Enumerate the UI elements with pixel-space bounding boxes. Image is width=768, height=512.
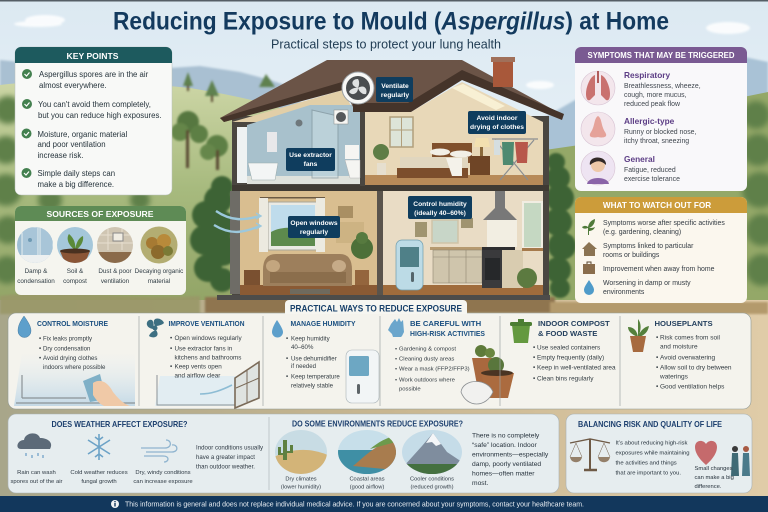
icon: house <box>582 242 597 256</box>
column: control moisture: Avoid drying clothes <box>43 355 97 362</box>
sources header: SOURCES OF EXPOSURE <box>47 209 154 219</box>
balancing text <box>616 440 690 476</box>
icon: soil and compost <box>57 227 93 263</box>
sources header <box>15 206 186 221</box>
icon: decaying organic material <box>140 226 178 264</box>
watch text: Symptoms worse after specific activities <box>603 220 725 227</box>
sources labels: Damp & <box>25 268 48 275</box>
column: houseplants: and moisture <box>660 344 698 350</box>
icon: drop <box>18 316 31 338</box>
panel: practical ways to reduce exposure <box>8 300 751 409</box>
environment note: There is no completely <box>472 432 540 440</box>
small changes text: Small changes <box>694 466 733 472</box>
column: be careful: • <box>395 366 397 372</box>
icon: lungs <box>581 71 615 105</box>
icon: dust and poor ventilation <box>97 227 133 263</box>
label: open windows regularly: Open windows <box>290 220 338 227</box>
environment labels: (lower humidity) <box>281 484 321 490</box>
icon: heart <box>695 441 717 465</box>
key points text: make a big difference. <box>38 180 114 189</box>
column: houseplants: • <box>656 364 659 372</box>
weather labels: fungal growth <box>81 479 117 485</box>
label: open windows regularly <box>288 216 340 238</box>
practical heading tab <box>285 300 467 314</box>
panel: balancing risk and quality of life <box>566 414 752 493</box>
sources labels: compost <box>63 278 87 285</box>
column: compost: • <box>533 376 535 382</box>
column: houseplants: Good ventilation helps <box>660 384 725 390</box>
column: houseplants: • <box>656 384 659 390</box>
label: open windows regularly: regularly <box>300 229 328 236</box>
key points text: increase risk. <box>38 151 83 160</box>
column: be careful: • <box>395 346 397 352</box>
column: compost: Empty frequently (daily) <box>537 354 604 362</box>
weather labels: Cold weather reduces <box>70 470 128 476</box>
symptoms text: exercise tolerance <box>624 176 680 183</box>
icon: compost bin <box>510 319 532 343</box>
symptoms text <box>624 70 701 183</box>
environment labels: (reduced growth) <box>410 484 454 490</box>
icon: drop <box>272 320 283 338</box>
label: ventilate regularly: regularly <box>381 92 409 99</box>
sources labels: ventilation <box>101 278 130 285</box>
footer bar: This information is general and does not replace individual medical advice. If you are concerned about your symptoms, contact your healthcare team. <box>125 500 584 508</box>
watch header <box>575 197 747 213</box>
house illustration <box>214 57 564 300</box>
bathroom furnishings <box>248 110 360 180</box>
column: compost <box>510 319 616 382</box>
environment note: homes—often matter <box>472 470 535 478</box>
column: houseplants: • <box>656 334 659 342</box>
key points text: almost everywhere. <box>39 81 107 90</box>
clothes rack <box>492 139 538 180</box>
icon: damp window <box>17 227 53 263</box>
weather note: have a greater impact <box>196 454 255 461</box>
icon: nose <box>581 112 615 146</box>
symptoms text: General <box>624 154 655 164</box>
icon: gloves <box>388 318 404 337</box>
watch text: Worsening in damp or musty <box>603 280 691 287</box>
weather labels <box>10 470 193 485</box>
image: mountain <box>402 430 462 474</box>
column: manage humidity: • <box>286 374 288 380</box>
column: compost: Use sealed containers <box>537 344 600 352</box>
column: improve ventilation: • <box>170 335 172 342</box>
column: control moisture: • <box>39 355 41 362</box>
check icons <box>22 69 32 178</box>
label: ventilate regularly <box>376 77 413 102</box>
label: control humidity <box>408 196 472 219</box>
watch text: Improvement when away from home <box>603 266 715 273</box>
column: be careful <box>388 318 514 404</box>
symptoms text: reduced peak flow <box>624 101 680 108</box>
column: houseplants: Avoid overwatering <box>660 354 716 362</box>
environment labels: (good airflow) <box>350 484 384 490</box>
weather note: than outdoor weather. <box>196 464 255 470</box>
symptoms text: itchy throat, sneezing <box>624 138 689 145</box>
column: manage humidity: if needed <box>291 363 316 370</box>
symptoms header: SYMPTOMS THAT MAY BE TRIGGERED <box>588 51 735 60</box>
chimney <box>491 57 515 87</box>
weather note: Indoor conditions usually <box>196 444 264 452</box>
key points text <box>38 70 162 189</box>
column: be careful: BE CAREFUL WITH <box>410 319 482 328</box>
column: be careful: Wear a mask (FFP2/FFP3) <box>399 366 470 372</box>
icon: hand wiping <box>83 374 130 406</box>
column: be careful: Gardening & compost <box>399 346 456 352</box>
column: manage humidity: • <box>286 356 288 362</box>
symptoms text: Respiratory <box>624 70 670 80</box>
environments heading: DO SOME ENVIRONMENTS REDUCE EXPOSURE? <box>292 420 463 428</box>
column: be careful: Work outdoors where <box>399 378 456 384</box>
column: be careful: Cleaning dusty areas <box>399 356 454 362</box>
label: control humidity: Control humidity <box>413 201 467 208</box>
icon: info <box>111 500 119 508</box>
label: avoid indoor drying: drying of clothes <box>470 124 524 131</box>
watch text: environments <box>603 289 645 296</box>
weather labels: Rain can wash <box>17 470 56 476</box>
symptoms text: Runny or blocked nose, <box>624 129 696 136</box>
column: control moisture: Fix leaks promptly <box>43 336 93 342</box>
fan icon <box>342 72 374 104</box>
environment labels: Dry climates <box>285 476 317 482</box>
small changes text: difference. <box>694 484 722 490</box>
environment labels: Cooler conditions <box>410 476 454 482</box>
column: control moisture <box>14 316 135 406</box>
key points text: Moisture, organic material <box>38 130 127 139</box>
column: manage humidity: MANAGE HUMIDITY <box>290 319 356 328</box>
icon: wind <box>141 440 177 462</box>
icon: fatigued person <box>581 151 615 185</box>
key points text: Aspergillus spores are in the air <box>39 70 149 79</box>
key points text: You can't avoid them completely, <box>38 100 151 109</box>
key points text: Simple daily steps can <box>38 169 115 178</box>
environment labels <box>281 476 454 490</box>
sources labels: Decaying organic <box>135 268 183 275</box>
column: improve ventilation: kitchens and bathrooms <box>174 354 241 362</box>
house walls <box>217 82 550 300</box>
symptoms text: Breathlessness, wheeze, <box>624 83 701 90</box>
column: houseplants: Risk comes from soil <box>660 334 721 342</box>
panel: key points <box>15 47 172 195</box>
label: use extractor fans: fans <box>304 161 318 168</box>
key points header <box>15 47 172 63</box>
footer bar <box>0 496 768 512</box>
balancing heading: BALANCING RISK AND QUALITY OF LIFE <box>578 420 722 429</box>
environment note: most. <box>472 480 488 487</box>
column: manage humidity: Use dehumidifier <box>291 356 337 362</box>
column: houseplants <box>628 319 732 390</box>
symptoms text: cough, more mucus, <box>624 92 687 99</box>
sources labels: condensation <box>17 278 55 285</box>
icon: scales <box>570 439 610 470</box>
balancing text: the activities and things <box>616 460 677 466</box>
kitchen furnishings <box>415 191 543 288</box>
column: compost: Clean bins regularly <box>537 376 594 382</box>
sources labels: material <box>148 278 170 285</box>
column: control moisture: CONTROL MOISTURE <box>37 319 108 328</box>
column: improve ventilation <box>147 318 259 408</box>
key points header: KEY POINTS <box>67 51 119 61</box>
sources labels <box>17 268 183 285</box>
icon: snowflake <box>88 434 110 460</box>
column: improve ventilation: IMPROVE VENTILATION <box>168 319 245 328</box>
column: control moisture: • <box>39 346 41 352</box>
practical heading tab: PRACTICAL WAYS TO REDUCE EXPOSURE <box>290 304 462 314</box>
icon: plant pots and mask <box>461 345 514 404</box>
column: improve ventilation: Open windows regularly <box>174 335 243 342</box>
label: use extractor fans <box>286 148 335 171</box>
balancing text: exposures while maintaining <box>616 450 690 456</box>
panel: sources of exposure <box>15 206 186 295</box>
label: ventilate regularly: Ventilate <box>381 83 409 90</box>
bedroom furnishings <box>373 117 490 178</box>
column: control moisture: Dry condensation <box>43 346 90 352</box>
subtitle: Practical steps to protect your lung health <box>271 38 501 52</box>
icon: fan <box>147 318 164 337</box>
column: improve ventilation: • <box>170 346 172 352</box>
key points text: but you can reduce high exposures. <box>38 111 162 120</box>
column: houseplants: waterings <box>659 374 689 380</box>
column: be careful: • <box>395 356 397 362</box>
column: houseplants: Allow soil to dry between <box>660 364 732 372</box>
watch header: WHAT TO WATCH OUT FOR <box>603 201 711 210</box>
small changes text <box>694 466 734 490</box>
environment note: damp, poorly ventilated <box>472 461 541 468</box>
dehumidifier <box>396 240 423 290</box>
column: improve ventilation: Use extractor fans in <box>174 346 233 352</box>
weather note <box>196 444 264 470</box>
image: coast <box>338 430 396 474</box>
environment note <box>472 432 549 487</box>
icon: suitcase <box>583 262 595 274</box>
symptoms text: Allergic-type <box>624 116 675 126</box>
sources labels: Soil & <box>67 268 84 275</box>
environment labels: Coastal areas <box>349 476 385 482</box>
column: compost: • <box>533 364 535 372</box>
column: improve ventilation: and airflow clear <box>174 372 220 380</box>
icon: dehumidifier <box>346 350 379 403</box>
symptoms header <box>575 47 747 63</box>
icon: open window <box>235 362 259 408</box>
watch text: (e.g. gardening, cleaning) <box>603 229 681 236</box>
watch text <box>603 220 725 296</box>
column: manage humidity: • <box>286 336 288 342</box>
label: avoid indoor drying <box>468 111 526 134</box>
living room furnishings <box>244 197 373 294</box>
panel: what to watch out for <box>575 197 747 303</box>
weather labels: can increase exposure <box>133 479 193 485</box>
column: improve ventilation: • <box>170 364 172 370</box>
sources labels: Dust & poor <box>98 268 132 275</box>
small changes text: can make a big <box>694 475 734 481</box>
column: compost: INDOOR COMPOST <box>538 319 610 328</box>
watch text: Symptoms linked to particular <box>603 243 694 250</box>
column: be careful: • <box>395 378 397 384</box>
column: be careful: possible <box>399 386 421 392</box>
environment note: environments—especially <box>472 452 549 458</box>
column: manage humidity: relatively stable <box>291 382 334 390</box>
column: improve ventilation: Keep vents open <box>174 364 222 370</box>
icon: rain cloud <box>17 433 51 458</box>
column: compost: Keep in well-ventilated area <box>537 364 616 372</box>
icon: potted plant <box>628 319 649 352</box>
icon: leaf <box>582 219 595 235</box>
balancing text: It’s about reducing high-risk <box>616 440 687 446</box>
column: manage humidity: 40–60% <box>291 344 314 351</box>
panel: symptoms <box>575 47 747 191</box>
icon: people <box>731 446 750 476</box>
roof <box>220 57 564 122</box>
column: control moisture: • <box>39 336 41 342</box>
column: manage humidity <box>272 319 379 403</box>
weather labels: Dry, windy conditions <box>135 470 191 476</box>
balancing text: that are important to you. <box>616 470 681 476</box>
column: be careful: HIGH-RISK ACTIVITIES <box>410 329 485 338</box>
column: compost: • <box>533 344 535 352</box>
column: control moisture: indoors where possible <box>43 364 106 371</box>
title: Reducing Exposure to Mould (Aspergillus) at Home <box>113 8 669 36</box>
column: manage humidity: Keep humidity <box>291 336 331 342</box>
label: avoid indoor drying: Avoid indoor <box>476 115 518 122</box>
column: compost: & FOOD WASTE <box>538 329 597 338</box>
panel: weather and environments <box>8 414 559 493</box>
column: compost: • <box>533 354 535 362</box>
airflow arrows <box>214 211 261 232</box>
icon: water drop <box>584 280 594 295</box>
image: desert <box>275 430 327 474</box>
column: houseplants: • <box>656 354 659 362</box>
key points text: and poor ventilation <box>38 140 106 149</box>
weather labels: spores out of the air <box>10 479 63 485</box>
label: use extractor fans: Use extractor <box>289 152 332 159</box>
watch text: rooms or buildings <box>603 252 660 259</box>
symptoms text: Fatigue, reduced <box>624 167 676 174</box>
column: houseplants: HOUSEPLANTS <box>654 319 713 328</box>
weather heading: DOES WEATHER AFFECT EXPOSURE? <box>52 420 188 429</box>
environment note: “safe” location. Indoor <box>472 442 537 449</box>
label: control humidity: (ideally 40–60%) <box>414 210 466 217</box>
column: manage humidity: Keep temperature <box>291 374 340 380</box>
